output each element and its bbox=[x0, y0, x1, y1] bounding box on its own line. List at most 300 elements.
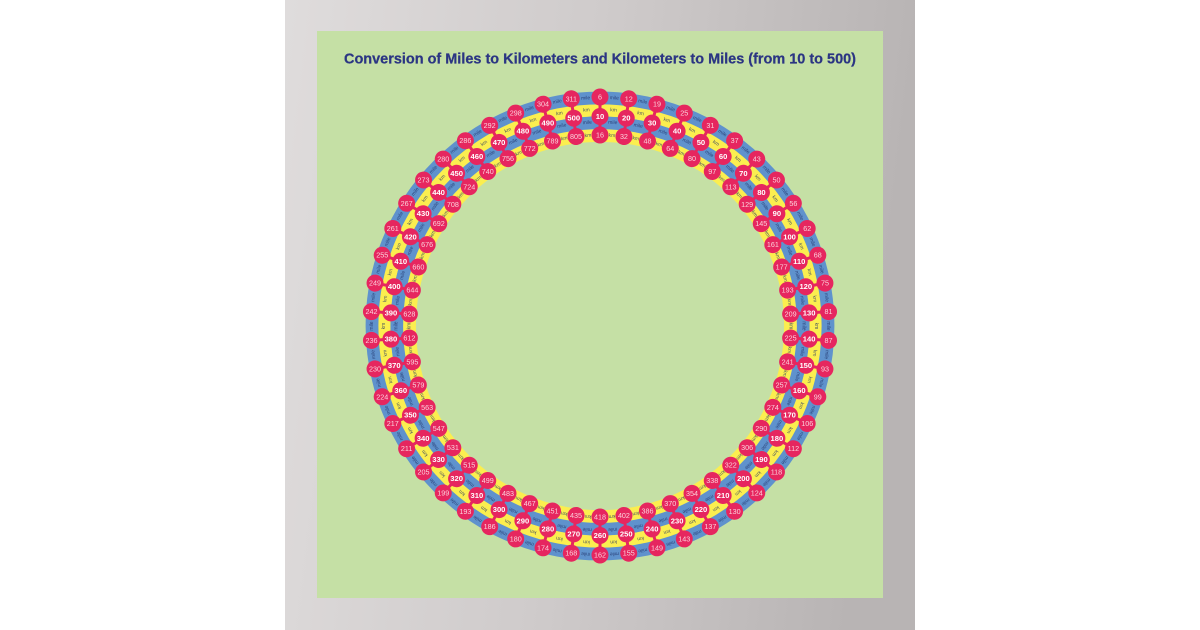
spoke 300: mile bbox=[485, 493, 496, 503]
spoke 190: mile bbox=[743, 460, 754, 471]
spoke 80: km bbox=[750, 210, 759, 218]
spoke 110: km bbox=[805, 268, 813, 276]
spoke 360: km bbox=[412, 369, 419, 377]
spoke 260: mile bbox=[582, 526, 592, 532]
spoke 70: mile bbox=[761, 165, 772, 175]
spoke 100: 161 bbox=[767, 240, 779, 249]
spoke 500: mile bbox=[582, 120, 592, 126]
spoke 200: km bbox=[733, 488, 742, 497]
spoke 450: 280 bbox=[437, 155, 449, 164]
spoke 60 bbox=[700, 129, 755, 190]
spoke 70: 43 bbox=[753, 155, 761, 164]
spoke 130: mile bbox=[825, 321, 831, 331]
spoke 50: km bbox=[711, 139, 720, 148]
spoke 230: km bbox=[655, 503, 663, 511]
spoke 90: mile bbox=[795, 211, 805, 222]
spoke 250 bbox=[604, 506, 638, 564]
spoke 410: mile bbox=[406, 246, 415, 256]
spoke 90: km bbox=[763, 230, 771, 239]
spoke 210: mile bbox=[703, 493, 715, 503]
spoke 330: mile bbox=[430, 440, 440, 451]
spoke 350: mile bbox=[383, 404, 392, 415]
spoke 190: km bbox=[753, 469, 762, 478]
spoke 300: km bbox=[480, 504, 489, 513]
spoke 210: 130 bbox=[729, 507, 741, 516]
spoke 260: 260 bbox=[594, 531, 606, 540]
spoke 150: mile bbox=[817, 378, 825, 388]
spoke 440: 440 bbox=[432, 188, 445, 197]
spoke 450: mile bbox=[449, 145, 460, 156]
spoke 250: km bbox=[610, 538, 617, 545]
spoke 420: 261 bbox=[387, 224, 399, 233]
spoke 310: km bbox=[474, 468, 483, 477]
spoke 320: 199 bbox=[437, 488, 449, 497]
spoke 410 bbox=[371, 234, 432, 278]
spoke 10: mile bbox=[608, 120, 618, 126]
spoke 100: km bbox=[797, 242, 805, 251]
spoke 390: 390 bbox=[385, 308, 397, 317]
spoke 410: 660 bbox=[412, 262, 424, 271]
spoke 160 bbox=[768, 374, 829, 418]
spoke 350: mile bbox=[406, 395, 415, 406]
spoke 270: mile bbox=[552, 546, 562, 554]
spoke 300: mile bbox=[472, 513, 483, 523]
spoke 260: km bbox=[583, 538, 590, 545]
spoke 60: mile bbox=[724, 164, 735, 175]
spoke 340: 340 bbox=[417, 434, 429, 443]
spoke 150: 150 bbox=[799, 361, 812, 370]
spoke 470: mile bbox=[508, 137, 519, 147]
spoke 440: 273 bbox=[418, 176, 430, 185]
spoke 30: 19 bbox=[653, 100, 661, 109]
spoke 40: km bbox=[677, 149, 685, 158]
spoke 50: 50 bbox=[697, 138, 705, 147]
spoke 40: 25 bbox=[680, 109, 688, 118]
spoke 400: mile bbox=[375, 264, 383, 274]
spoke 160: 257 bbox=[776, 381, 788, 390]
spoke 200: mile bbox=[724, 478, 735, 488]
spoke 50: mile bbox=[704, 149, 715, 159]
spoke 290: 467 bbox=[524, 499, 536, 508]
spoke 400: km bbox=[387, 268, 395, 276]
spoke 420: 420 bbox=[404, 232, 417, 241]
spoke 120: 75 bbox=[821, 279, 829, 288]
spoke 480: 772 bbox=[524, 144, 536, 153]
spoke 120: km bbox=[786, 298, 792, 306]
spoke 210: km bbox=[711, 504, 720, 513]
spoke 420 bbox=[381, 207, 443, 256]
spoke 70: km bbox=[734, 191, 743, 200]
spoke 220: km bbox=[677, 494, 685, 503]
spoke 170: 170 bbox=[783, 411, 796, 420]
spoke 140: km bbox=[811, 349, 818, 357]
spoke 480: km bbox=[529, 117, 537, 124]
spoke 490 bbox=[533, 91, 573, 151]
spoke 330: 531 bbox=[447, 443, 459, 452]
spoke 490: 490 bbox=[542, 119, 554, 128]
spoke 180: 180 bbox=[771, 434, 783, 443]
spoke 40: 64 bbox=[666, 144, 674, 153]
spoke 20: km bbox=[632, 135, 640, 142]
spoke 340: km bbox=[429, 413, 437, 422]
spoke 300: 300 bbox=[493, 505, 505, 514]
spoke 370: km bbox=[382, 349, 389, 357]
spoke 100: mile bbox=[785, 246, 794, 257]
spoke 60: mile bbox=[740, 145, 751, 156]
spoke 30: 30 bbox=[648, 119, 656, 128]
spoke 240: 240 bbox=[646, 524, 658, 533]
spoke 340: mile bbox=[417, 418, 427, 430]
spoke 120: km bbox=[811, 295, 818, 303]
spoke 60: 37 bbox=[731, 136, 739, 145]
spoke 90 bbox=[750, 192, 811, 245]
spoke 290: 180 bbox=[510, 534, 522, 543]
spoke 380: 236 bbox=[365, 336, 377, 345]
spoke 240: km bbox=[632, 510, 640, 517]
spoke 250: 402 bbox=[618, 511, 630, 520]
gray frame background bbox=[285, 0, 915, 630]
spoke 440: mile bbox=[428, 164, 439, 175]
spoke 100: mile bbox=[808, 237, 817, 248]
spoke 310: mile bbox=[449, 496, 460, 507]
spoke 90: km bbox=[785, 218, 794, 226]
spoke 140: mile bbox=[798, 347, 805, 357]
spoke 310: km bbox=[458, 488, 467, 497]
spoke 200: 200 bbox=[737, 474, 750, 483]
spoke 210: 210 bbox=[717, 491, 729, 500]
spoke 280: km bbox=[529, 528, 537, 535]
spoke 420: km bbox=[429, 230, 437, 239]
spoke 40 bbox=[659, 102, 705, 163]
spoke 440: km bbox=[438, 174, 447, 183]
spoke 200: mile bbox=[740, 496, 751, 507]
spoke 400 bbox=[365, 263, 424, 300]
spoke 290: mile bbox=[497, 528, 508, 537]
spoke 400: 400 bbox=[388, 282, 401, 291]
spoke 490: km bbox=[560, 135, 568, 142]
spoke 230: 370 bbox=[664, 499, 676, 508]
spoke 250: km bbox=[608, 513, 615, 519]
spoke 350: km bbox=[395, 401, 403, 410]
spoke 40: mile bbox=[681, 137, 692, 147]
spoke 270: 435 bbox=[570, 511, 582, 520]
spoke 280: 280 bbox=[542, 524, 554, 533]
spoke 340: km bbox=[406, 426, 415, 434]
spoke 450: km bbox=[458, 155, 467, 164]
spoke 30: mile bbox=[658, 128, 668, 137]
spoke 80: 80 bbox=[757, 188, 766, 197]
spoke 50: 80 bbox=[688, 154, 696, 163]
spoke 170: 274 bbox=[767, 403, 779, 412]
spoke 20: 32 bbox=[620, 132, 628, 141]
spoke 310: 310 bbox=[471, 491, 483, 500]
spoke 230: 230 bbox=[671, 516, 683, 525]
spoke 150: km bbox=[805, 376, 813, 384]
spoke 300: km bbox=[494, 483, 502, 491]
spoke 360 bbox=[368, 364, 429, 407]
spoke 160: km bbox=[773, 392, 781, 400]
spoke 280: mile bbox=[524, 539, 535, 547]
spoke 10: mile bbox=[610, 95, 619, 102]
spoke 20: mile bbox=[638, 98, 648, 106]
spoke 100: 100 bbox=[783, 232, 796, 241]
spoke 90: 145 bbox=[755, 219, 767, 228]
spoke 160: 160 bbox=[793, 386, 806, 395]
spoke 180: km bbox=[770, 448, 779, 457]
spoke 360: km bbox=[387, 376, 395, 384]
spoke 370: mile bbox=[370, 349, 377, 360]
spoke 470 bbox=[478, 109, 529, 170]
concentric bands bbox=[372, 98, 828, 554]
spoke 360: 360 bbox=[394, 386, 407, 395]
spoke 70: 113 bbox=[725, 182, 736, 191]
spoke 200 bbox=[711, 453, 769, 512]
spoke 10: km bbox=[608, 133, 615, 139]
spoke 320: mile bbox=[428, 477, 439, 487]
spoke 130: mile bbox=[800, 321, 807, 331]
spoke 450: 450 bbox=[450, 169, 463, 178]
spoke 370: km bbox=[408, 346, 414, 354]
spoke 110: 68 bbox=[814, 251, 822, 260]
spoke 180: km bbox=[750, 434, 759, 442]
spoke 360: mile bbox=[399, 371, 407, 382]
spoke 450 bbox=[431, 140, 489, 199]
spoke 210: 338 bbox=[706, 476, 718, 485]
spoke 480 bbox=[505, 98, 551, 159]
spoke 150: mile bbox=[793, 371, 801, 382]
spoke 320: km bbox=[438, 469, 447, 478]
spoke 490: 304 bbox=[537, 100, 549, 109]
spoke 150: 241 bbox=[782, 357, 794, 366]
spoke 380: mile bbox=[393, 321, 400, 331]
spoke 10 bbox=[592, 88, 619, 144]
spoke 370: 230 bbox=[369, 364, 381, 373]
spoke 90: 56 bbox=[789, 199, 797, 208]
spoke 390: mile bbox=[395, 295, 402, 305]
spoke 390: 628 bbox=[403, 310, 415, 319]
spoke 400: 249 bbox=[369, 279, 381, 288]
spoke 220 bbox=[671, 482, 722, 543]
spoke 10: km bbox=[610, 107, 617, 114]
spoke 40: mile bbox=[692, 115, 703, 124]
spoke 100: 62 bbox=[803, 224, 811, 233]
spoke 280: 174 bbox=[537, 543, 549, 552]
spoke 290: mile bbox=[508, 505, 519, 515]
spoke 330: 205 bbox=[418, 467, 430, 476]
spoke 300 bbox=[469, 477, 520, 538]
spoke 110: 110 bbox=[793, 257, 805, 266]
spoke 60: km bbox=[717, 175, 726, 184]
spoke 290 bbox=[495, 489, 541, 550]
spoke 350 bbox=[377, 386, 438, 435]
spoke 400: 644 bbox=[406, 286, 418, 295]
spoke 410: 410 bbox=[394, 257, 407, 266]
spoke 180: mile bbox=[759, 440, 770, 451]
spoke 390: km bbox=[408, 298, 414, 306]
spoke 50: 31 bbox=[706, 121, 714, 130]
spoke 470: mile bbox=[497, 115, 509, 124]
spoke 340 bbox=[389, 407, 450, 460]
spoke 430: 692 bbox=[433, 219, 445, 228]
spoke 430: km bbox=[421, 195, 430, 204]
spoke 440: mile bbox=[446, 181, 457, 192]
spoke 320: 320 bbox=[450, 474, 463, 483]
spoke 10: 6 bbox=[598, 92, 602, 102]
spoke 320: mile bbox=[446, 460, 457, 471]
spoke 180: 112 bbox=[788, 444, 799, 453]
spoke 40: 40 bbox=[673, 127, 681, 136]
spoke 500: 805 bbox=[570, 132, 582, 141]
spoke 280: km bbox=[537, 503, 545, 511]
spoke 350: 350 bbox=[404, 411, 417, 420]
spoke 220: km bbox=[688, 517, 696, 526]
spoke 350: km bbox=[419, 392, 427, 400]
spoke 130: 209 bbox=[785, 310, 797, 319]
spoke 160: km bbox=[797, 401, 805, 410]
spoke 360: 579 bbox=[412, 381, 424, 390]
spoke 440 bbox=[412, 160, 472, 216]
spoke 310: mile bbox=[465, 477, 476, 488]
spoke 380 bbox=[362, 318, 418, 349]
spoke 80: mile bbox=[760, 201, 770, 212]
spoke 470: 470 bbox=[493, 138, 505, 147]
spoke 100 bbox=[762, 217, 823, 266]
spoke 190: 118 bbox=[771, 467, 782, 476]
spoke 130 bbox=[782, 303, 838, 334]
spoke 50: km bbox=[698, 161, 706, 169]
spoke 200: 124 bbox=[751, 488, 763, 497]
spoke 240: km bbox=[637, 535, 644, 542]
spoke 450: km bbox=[474, 175, 483, 184]
spoke 380: km bbox=[406, 323, 413, 329]
spoke 470: 756 bbox=[502, 154, 514, 163]
spoke 150: 93 bbox=[821, 364, 829, 373]
spoke 470: km bbox=[515, 149, 523, 158]
spoke 190: mile bbox=[761, 477, 772, 488]
spoke 320: 515 bbox=[463, 461, 475, 470]
spoke 120: 120 bbox=[799, 282, 812, 291]
spoke 210: km bbox=[698, 483, 706, 491]
spoke 370 bbox=[363, 341, 422, 379]
spoke 310: 499 bbox=[482, 476, 494, 485]
spoke 10: 16 bbox=[596, 130, 604, 140]
spoke 190: 306 bbox=[741, 443, 753, 452]
spoke 480: 298 bbox=[510, 109, 522, 118]
spoke 460: km bbox=[480, 139, 489, 148]
spoke 250: mile bbox=[608, 526, 618, 532]
spoke 500: km bbox=[585, 133, 592, 139]
spoke 30 bbox=[637, 94, 678, 154]
spoke 80: mile bbox=[779, 187, 790, 198]
spoke 50 bbox=[680, 114, 731, 175]
spoke 290: km bbox=[504, 517, 512, 526]
spoke 170 bbox=[757, 396, 819, 445]
spoke 60: 97 bbox=[708, 167, 716, 176]
spoke 460: 740 bbox=[482, 167, 494, 176]
spoke 10: 10 bbox=[596, 112, 604, 121]
spoke 330: mile bbox=[410, 454, 421, 465]
spoke 220: mile bbox=[691, 528, 703, 537]
spoke 500: km bbox=[583, 107, 590, 114]
spoke 430: 430 bbox=[417, 209, 429, 218]
green poster panel bbox=[317, 31, 883, 598]
spoke 60: km bbox=[733, 155, 742, 164]
spoke 90: 90 bbox=[773, 209, 781, 218]
spoke 140: km bbox=[786, 346, 792, 354]
spoke 130: km bbox=[813, 323, 819, 329]
spoke 240: mile bbox=[633, 522, 643, 530]
spoke 220: 137 bbox=[704, 522, 716, 531]
spoke 250: 250 bbox=[620, 529, 633, 538]
spoke 490: mile bbox=[552, 98, 563, 106]
spoke 300: 483 bbox=[502, 489, 514, 498]
spoke 110: 177 bbox=[776, 262, 788, 271]
spoke 410: km bbox=[419, 252, 427, 260]
spoke 470: km bbox=[504, 126, 512, 135]
spoke 40: km bbox=[688, 126, 696, 135]
spoke 140: 225 bbox=[785, 333, 797, 342]
spoke 390: km bbox=[382, 295, 389, 303]
spoke 20 bbox=[614, 89, 649, 147]
spoke 200: 322 bbox=[725, 461, 737, 470]
spoke 180: 290 bbox=[755, 424, 767, 433]
spoke 380: 380 bbox=[385, 335, 397, 344]
spoke 150 bbox=[776, 352, 835, 389]
spoke 80 bbox=[735, 168, 795, 225]
spoke 450: 724 bbox=[463, 182, 475, 191]
spoke 30: km bbox=[663, 117, 671, 124]
spoke 80: 129 bbox=[741, 200, 753, 209]
spoke 420: km bbox=[406, 218, 415, 226]
spoke 330 bbox=[405, 427, 465, 484]
spoke 220: mile bbox=[681, 505, 692, 515]
spoke 170: 106 bbox=[801, 419, 813, 428]
spoke 390: 242 bbox=[365, 307, 377, 316]
spoke 170: km bbox=[785, 426, 794, 434]
spoke 340: 547 bbox=[433, 424, 445, 433]
spoke 290: km bbox=[515, 494, 523, 503]
spoke 410: 255 bbox=[376, 251, 388, 260]
spoke 430 bbox=[395, 182, 456, 235]
spoke 480: mile bbox=[532, 128, 543, 137]
spoke 210 bbox=[692, 469, 746, 529]
spoke 380: 612 bbox=[403, 333, 415, 342]
title: Conversion of Miles to Kilometers and Kilometers to Miles (from 10 to 500) bbox=[344, 50, 856, 68]
spoke 500: 311 bbox=[566, 94, 577, 103]
spoke 360: 224 bbox=[376, 392, 388, 401]
spoke 480: km bbox=[537, 141, 545, 149]
spoke 270: 168 bbox=[565, 549, 577, 558]
spoke 220: 220 bbox=[695, 505, 707, 514]
spoke 140: 140 bbox=[803, 335, 815, 344]
spoke 70: mile bbox=[743, 181, 754, 192]
spoke 250: 155 bbox=[623, 549, 635, 558]
spoke 330: km bbox=[441, 434, 450, 442]
spoke 270 bbox=[551, 505, 586, 563]
spoke 340: 211 bbox=[401, 444, 412, 453]
spoke 330: km bbox=[421, 448, 430, 457]
spoke 320 bbox=[423, 446, 481, 505]
spoke 140: 87 bbox=[825, 336, 833, 345]
spoke 390 bbox=[362, 292, 419, 323]
spoke 310 bbox=[445, 462, 500, 523]
spoke 490: 789 bbox=[547, 137, 559, 146]
spoke 290: 290 bbox=[517, 516, 529, 525]
spoke 100: km bbox=[773, 252, 781, 260]
spoke 360: mile bbox=[375, 377, 383, 388]
spoke 280 bbox=[522, 498, 563, 558]
spoke 420: 676 bbox=[421, 240, 433, 249]
